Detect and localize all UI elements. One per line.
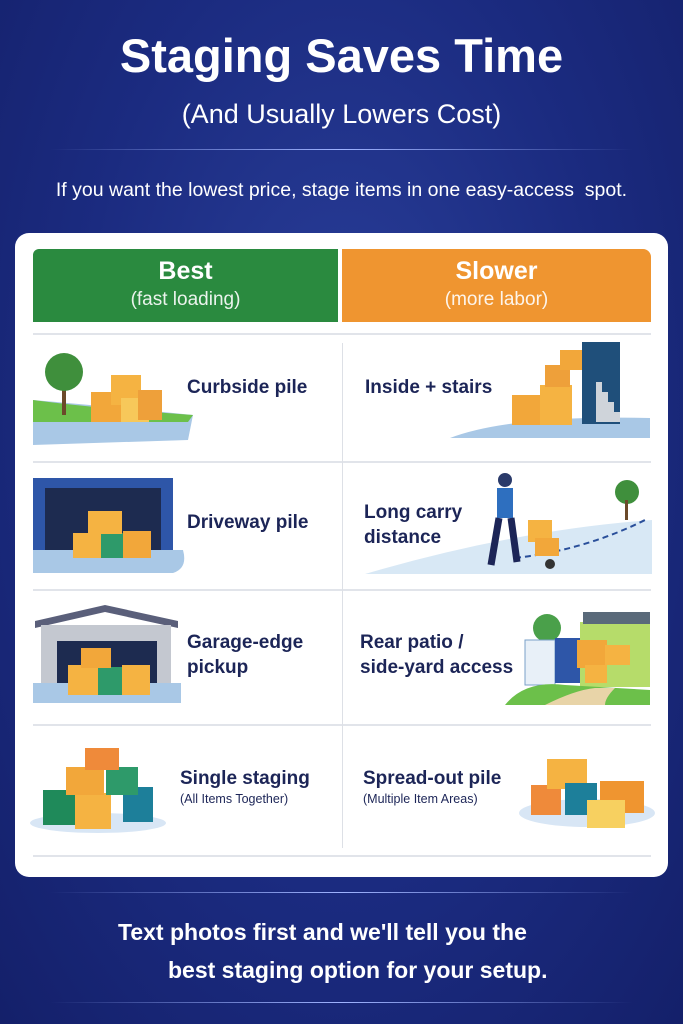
header: slower: (more labor) bbox=[445, 289, 548, 310]
label: inside stairs: Inside + stairs bbox=[365, 377, 492, 398]
header: best bbox=[33, 249, 338, 322]
subtitle: (And Usually Lowers Cost) bbox=[182, 99, 501, 129]
label: rear patio bbox=[360, 632, 513, 678]
icon: driveway pile bbox=[33, 478, 184, 573]
label: spread-out pile: Spread-out pile bbox=[363, 768, 501, 789]
title: Staging Saves Time bbox=[120, 29, 563, 82]
footer call to action: best staging option for your setup. bbox=[168, 957, 548, 983]
footer call to action bbox=[118, 919, 548, 983]
label: rear patio: side-yard access bbox=[360, 657, 513, 678]
panel: comparison card bbox=[15, 233, 668, 877]
label: curbside pile: Curbside pile bbox=[187, 377, 307, 398]
header: best: (fast loading) bbox=[131, 289, 240, 310]
icon: spread-out pile bbox=[519, 759, 655, 828]
label: spread-out pile bbox=[363, 768, 501, 806]
label: garage edge pickup bbox=[187, 632, 303, 678]
header: best: Best bbox=[158, 257, 213, 285]
label: garage edge pickup: Garage-edge bbox=[187, 632, 303, 653]
label: garage edge pickup: pickup bbox=[187, 657, 248, 678]
intro text: If you want the lowest price, stage items in one easy-access spot. bbox=[56, 179, 627, 201]
header: slower bbox=[342, 249, 651, 322]
icon: inside stairs bbox=[450, 342, 650, 438]
label: long carry distance bbox=[364, 502, 462, 548]
label: long carry distance: distance bbox=[364, 527, 441, 548]
icon: curbside pile bbox=[33, 353, 193, 445]
label: long carry distance: Long carry bbox=[364, 502, 462, 523]
header: slower: Slower bbox=[456, 257, 537, 285]
label: single staging: (All Items Together) bbox=[180, 792, 288, 806]
icon: single staging bbox=[30, 748, 166, 833]
label: single staging bbox=[180, 768, 310, 806]
label: driveway pile: Driveway pile bbox=[187, 512, 308, 533]
label: rear patio: Rear patio / bbox=[360, 632, 463, 653]
label: spread-out pile: (Multiple Item Areas) bbox=[363, 792, 478, 806]
icon: garage edge bbox=[33, 605, 181, 703]
icon: rear patio bbox=[505, 612, 650, 705]
footer call to action: Text photos first and we'll tell you the bbox=[118, 919, 527, 945]
label: single staging: Single staging bbox=[180, 768, 310, 789]
icon: long carry bbox=[366, 473, 652, 574]
